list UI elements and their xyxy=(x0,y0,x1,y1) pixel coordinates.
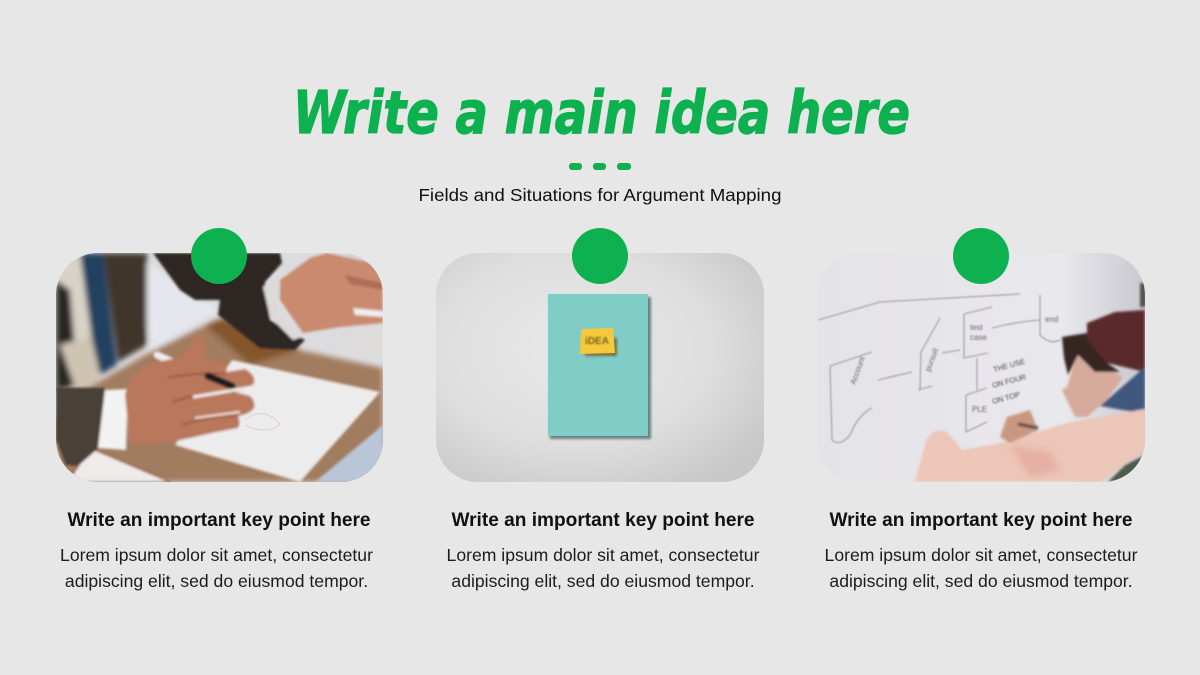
column 1 key point: Write an important key point here xyxy=(67,510,371,531)
column 3 key point: Write an important key point here xyxy=(829,510,1133,531)
column 3 body xyxy=(825,545,1138,591)
photo: man sketching a flowchart on a whiteboard: Account xyxy=(848,355,867,386)
near hand xyxy=(125,335,254,444)
badge: circle 1 xyxy=(191,228,247,284)
badge: circle 3 xyxy=(953,228,1009,284)
photo: man sketching a flowchart on a whiteboard: ON TOP xyxy=(991,390,1021,406)
column 2 body: Lorem ipsum dolor sit amet, consectetur xyxy=(447,545,759,565)
photo: man sketching a flowchart on a whiteboard: test xyxy=(970,323,984,332)
marker xyxy=(1018,424,1038,428)
column 1 body xyxy=(60,545,373,591)
title: Write a main idea here xyxy=(293,78,910,147)
hair xyxy=(1062,333,1120,375)
column 2 body xyxy=(447,545,760,591)
column 3 body: Lorem ipsum dolor sit amet, consectetur xyxy=(825,545,1137,565)
column 1 body: Lorem ipsum dolor sit amet, consectetur xyxy=(60,545,373,565)
photo: hands over documents at a desk xyxy=(56,253,383,482)
face xyxy=(1062,353,1123,417)
column 3 text xyxy=(825,510,1138,591)
photo: man sketching a flowchart on a whiteboard: PLE xyxy=(972,405,987,414)
photo: man sketching a flowchart on a whiteboard: case xyxy=(970,333,987,342)
near sleeve xyxy=(56,387,105,466)
far hand xyxy=(280,253,383,333)
far sleeve xyxy=(153,253,305,350)
hat xyxy=(1087,310,1145,372)
column 1 text xyxy=(60,510,373,591)
blue shirt xyxy=(1100,367,1145,414)
column 2 key point: Write an important key point here xyxy=(451,510,755,531)
column 1 body: adipiscing elit, sed do eiusmod tempor. xyxy=(65,571,368,591)
title divider dashes xyxy=(569,163,631,170)
photo: man sketching a flowchart on a whiteboard: ON FOUR xyxy=(991,372,1027,390)
column 2 body: adipiscing elit, sed do eiusmod tempor. xyxy=(451,571,755,591)
pen xyxy=(152,350,174,363)
paper xyxy=(175,360,380,482)
arm xyxy=(915,409,1145,482)
photo: man sketching a flowchart on a whiteboard xyxy=(817,253,1146,482)
sketch on paper xyxy=(245,414,280,430)
column 3 body: adipiscing elit, sed do eiusmod tempor. xyxy=(829,571,1133,591)
column 2 text xyxy=(447,510,760,591)
photo: man sketching a flowchart on a whiteboard: THE USE xyxy=(992,357,1026,374)
subtitle: Fields and Situations for Argument Mapping xyxy=(418,185,782,205)
badge: circle 2 xyxy=(572,228,628,284)
photo: man sketching a flowchart on a whiteboard: pursuit xyxy=(923,346,940,373)
photo: man sketching a flowchart on a whiteboard: end xyxy=(1045,315,1058,324)
photo: teal notebook with idea sticky note xyxy=(436,253,764,482)
photo: teal notebook with idea sticky note: iDEA xyxy=(585,336,609,347)
hand xyxy=(1000,410,1038,443)
book at lower left xyxy=(68,448,170,482)
